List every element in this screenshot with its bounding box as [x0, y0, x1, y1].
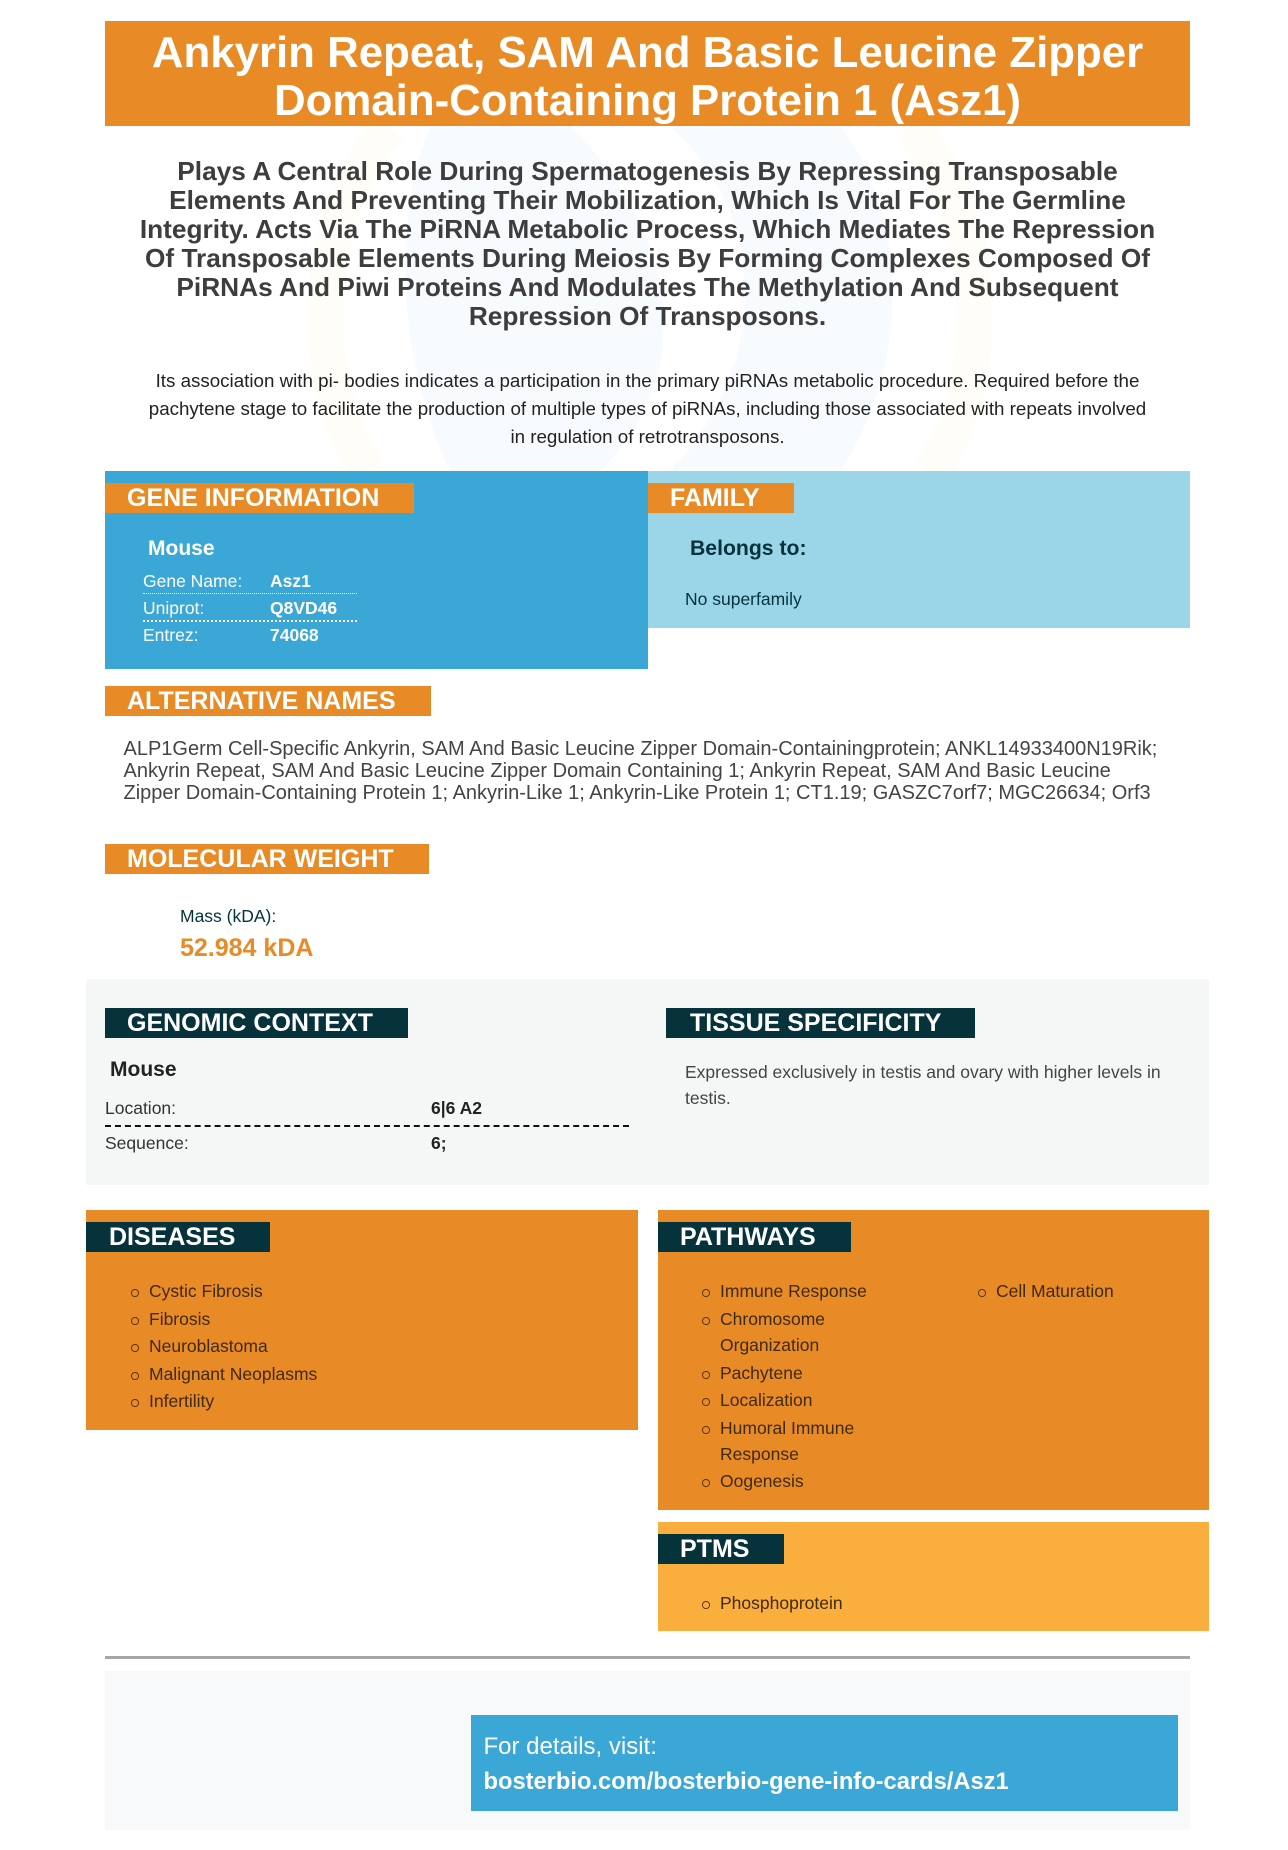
- entrez row: 74068: [270, 625, 319, 645]
- uniprot row: Uniprot:: [143, 598, 204, 618]
- summary heading: Integrity. Acts Via The PiRNA Metabolic Process, Which Mediates The Repression: [140, 214, 1155, 244]
- sequence row: [105, 1133, 447, 1153]
- summary heading: Repression Of Transposons.: [469, 301, 826, 331]
- heading: ptms: [658, 1534, 784, 1564]
- alternative names text: Ankyrin Repeat, SAM And Basic Leucine Zipper Domain Containing 1; Ankyrin Repeat, SAM And Basic Leucine: [124, 760, 1111, 782]
- summary heading: [140, 156, 1155, 331]
- heading: family: FAMILY: [670, 484, 759, 512]
- sequence row: 6;: [431, 1133, 447, 1153]
- ptm list: Phosphoprotein: [720, 1593, 843, 1613]
- summary heading: Plays A Central Role During Spermatogenesis By Repressing Transposable: [177, 156, 1118, 186]
- url: bosterbio.com/bosterbio-gene-info-cards/Asz1: [484, 1769, 1009, 1795]
- uniprot row: Q8VD46: [270, 598, 337, 618]
- callout: details link: [471, 1715, 1178, 1811]
- heading: diseases: [86, 1222, 270, 1252]
- uniprot row: [143, 596, 357, 622]
- alternative names text: [124, 738, 1157, 804]
- panel: footer: [105, 1671, 1190, 1830]
- description text: Its association with pi- bodies indicates a participation in the primary piRNAs metabolic procedure. Required before the: [156, 370, 1139, 391]
- summary heading: Of Transposable Elements During Meiosis By Forming Complexes Composed Of: [145, 243, 1150, 273]
- description text: pachytene stage to facilitate the production of multiple types of piRNAs, including those associated with repeats involved: [149, 398, 1146, 419]
- visit label: For details, visit:: [484, 1733, 657, 1760]
- pathway list: Response: [720, 1444, 799, 1464]
- summary heading: PiRNAs And Piwi Proteins And Modulates The Methylation And Subsequent: [176, 272, 1119, 302]
- mass label: Mass (kDA):: [180, 906, 276, 926]
- belongs to label: Belongs to:: [690, 537, 807, 560]
- description text: in regulation of retrotransposons.: [510, 426, 785, 447]
- tissue specificity text: [685, 1062, 1161, 1108]
- panel: gene information: [105, 471, 648, 669]
- pathway list: Cell Maturation: [996, 1281, 1114, 1301]
- heading: gene information: GENE INFORMATION: [127, 484, 379, 512]
- panel: pathways: [658, 1210, 1209, 1510]
- species label: Mouse: [148, 537, 215, 560]
- heading: diseases: DISEASES: [109, 1223, 235, 1251]
- disease list: Infertility: [149, 1391, 214, 1411]
- family value: No superfamily: [685, 589, 802, 609]
- panel: ptms: [658, 1522, 1209, 1631]
- title banner: Ankyrin Repeat, SAM And Basic Leucine Zipper: [152, 28, 1143, 77]
- heading: pathways: PATHWAYS: [680, 1223, 816, 1251]
- location row: Location:: [105, 1098, 176, 1118]
- panel: diseases: [86, 1210, 638, 1430]
- pathway list: Oogenesis: [720, 1471, 804, 1491]
- gene name row: Gene Name:: [143, 571, 242, 591]
- sequence row: Sequence:: [105, 1133, 189, 1153]
- watermark logo: [300, 126, 1000, 471]
- heading: pathways: [658, 1222, 851, 1252]
- pathway list: Organization: [720, 1335, 819, 1355]
- gene name row: [143, 569, 357, 594]
- description text: [149, 370, 1146, 447]
- entrez row: Entrez:: [143, 625, 198, 645]
- heading: tissue specificity: TISSUE SPECIFICITY: [690, 1009, 941, 1037]
- disease list: Cystic Fibrosis: [149, 1281, 263, 1301]
- mass value: 52.984 kDA: [180, 934, 313, 962]
- heading: ptms: PTMS: [680, 1535, 749, 1563]
- tissue specificity text: testis.: [685, 1088, 731, 1108]
- disease list: [131, 1281, 317, 1411]
- location row: 6|6 A2: [431, 1098, 482, 1118]
- pathway list: [702, 1281, 1114, 1491]
- title banner: Domain-Containing Protein 1 (Asz1): [274, 76, 1021, 125]
- alternative names text: ALP1Germ Cell-Specific Ankyrin, SAM And Basic Leucine Zipper Domain-Containingprotein; ANKL14933400N19Rik;: [124, 738, 1157, 760]
- summary heading: Elements And Preventing Their Mobilization, Which Is Vital For The Germline: [169, 185, 1126, 215]
- species label: Mouse: [110, 1058, 177, 1081]
- heading: molecular weight: MOLECULAR WEIGHT: [127, 845, 394, 873]
- location row: [105, 1096, 629, 1127]
- pathway list: Pachytene: [720, 1363, 803, 1383]
- panel: genomic context and tissue specificity: [86, 979, 1209, 1185]
- disease list: Malignant Neoplasms: [149, 1364, 317, 1384]
- footer divider: [105, 1656, 1190, 1659]
- disease list: Fibrosis: [149, 1309, 210, 1329]
- heading: alternative names: ALTERNATIVE NAMES: [127, 687, 396, 715]
- pathway list: Immune Response: [720, 1281, 867, 1301]
- tissue specificity text: Expressed exclusively in testis and ovary with higher levels in: [685, 1062, 1161, 1082]
- entrez row: [143, 625, 319, 645]
- pathway list: Localization: [720, 1390, 812, 1410]
- gene name row: Asz1: [270, 571, 311, 591]
- disease list: Neuroblastoma: [149, 1336, 268, 1356]
- pathway list: Chromosome: [720, 1309, 825, 1329]
- pathway list: Humoral Immune: [720, 1418, 854, 1438]
- heading: genomic context: GENOMIC CONTEXT: [127, 1009, 373, 1037]
- heading: family: [648, 483, 794, 513]
- panel: family: [648, 471, 1190, 628]
- title banner: [105, 21, 1190, 126]
- alternative names text: Zipper Domain-Containing Protein 1; Ankyrin-Like 1; Ankyrin-Like Protein 1; CT1.19; GASZC7orf7; MGC26634; Orf3: [124, 782, 1151, 804]
